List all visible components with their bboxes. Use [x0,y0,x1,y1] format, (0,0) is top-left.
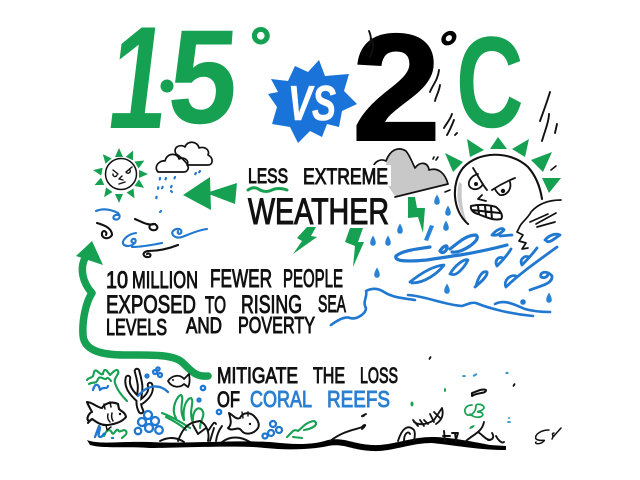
small sun [92,148,148,203]
drop group [370,194,552,303]
green seaweed [87,370,316,438]
line three: AND [186,313,222,338]
line one: THE [313,363,345,388]
letter C: C [456,10,524,156]
wind swirls [96,209,207,257]
green growth arrow [76,241,208,376]
upper right curls [492,229,560,242]
line three: POVERTY [238,312,315,338]
cloud outline [373,149,448,197]
blue swirl large [123,233,162,247]
dead reef [330,356,516,443]
black swirl lower [144,245,178,257]
grey storm cloud [373,149,448,197]
heavy drop streak [424,225,434,241]
word EXTREME: EXTREME [303,164,388,189]
lightning bolts [293,197,425,267]
line one: 10 [106,267,128,294]
arrow head [76,241,103,265]
artist signature [536,428,561,444]
title: 2 degrees C [352,3,557,173]
degree sign: ° [250,17,272,77]
numeral 2: 2 [352,3,441,173]
line two: RISING [241,291,302,319]
line two: EXPOSED [106,291,196,319]
grey shade [457,182,468,223]
line one: PEOPLE [283,265,343,293]
line three [106,312,315,340]
line three: LEVELS [106,314,167,340]
degree sign: ° [433,23,461,72]
sun rays [445,137,561,193]
rain drops [156,171,200,212]
bolt left [293,227,317,254]
middle wave [410,260,468,283]
debris outline [472,389,486,396]
cloud body [386,149,448,196]
big angry sun [433,137,561,249]
black swirl middle [135,219,157,230]
waves [331,229,560,325]
sun disc [455,155,542,224]
arrow head rear [206,183,237,204]
arrow stem [82,258,208,376]
line two [217,386,390,412]
white cloud [175,142,212,165]
pupils [474,182,505,193]
label VS: VS [288,77,336,131]
lower fish [228,412,259,434]
green wavy underline [248,188,287,192]
heat marks [368,31,557,141]
line two [106,291,346,319]
crest tube [440,235,477,252]
line two: SEA [318,291,346,318]
blue specks [462,372,511,423]
line one: FEWER [210,265,272,293]
line one: LOSS [360,363,398,388]
word WEATHER: WEATHER [248,191,389,232]
heading: less extreme weather [248,164,391,232]
numeral 5: 5 [164,2,243,152]
seabed line [87,437,506,451]
blue swirl right [172,229,207,238]
curls [475,249,511,287]
numeral 1: 1 [100,0,179,160]
black coral [128,371,151,411]
bolt right [408,197,425,233]
line one [106,265,343,294]
small clouds [156,142,212,212]
arrow head front [183,177,211,210]
text halo [300,165,391,186]
black dashes [433,157,556,192]
line two: CORAL [250,386,312,412]
black swirl left [97,223,112,238]
blue swirl left [96,209,120,220]
long surface wave [331,289,550,325]
sun rays [92,148,148,203]
line one: MILLION [132,267,198,294]
main wave [396,245,507,261]
double arrow pointing to small sun [183,177,237,210]
gritted teeth [471,205,502,220]
line one [217,363,398,388]
large fish [87,402,126,430]
fish skeleton [413,408,443,426]
dead coral fragments [330,414,504,443]
bolt middle [345,228,364,267]
black rocks and seabed [160,421,250,442]
rain drops and storm water [370,194,552,303]
title: 1.5 degrees [100,0,272,160]
blue coral clusters [93,367,282,438]
line two: REEFS [327,386,390,412]
healthy reef [87,367,316,442]
sun disc and face [106,158,136,190]
versus badge [268,60,357,143]
dark specks [361,356,516,418]
wave splash hand [517,200,561,249]
text: sea level impact [106,265,346,340]
word LESS: LESS [248,165,288,188]
foam dot [522,301,524,303]
text: coral reefs [217,363,398,412]
scattered specks [410,388,475,430]
blue starburst [268,60,357,143]
small fish [168,374,190,387]
grey cloud [156,154,188,172]
line two: TO [205,292,226,319]
line one: MITIGATE [217,363,298,388]
angry eyes [469,168,515,201]
line two: OF [217,387,240,412]
decimal point [160,80,174,92]
green dead coral [465,404,484,417]
